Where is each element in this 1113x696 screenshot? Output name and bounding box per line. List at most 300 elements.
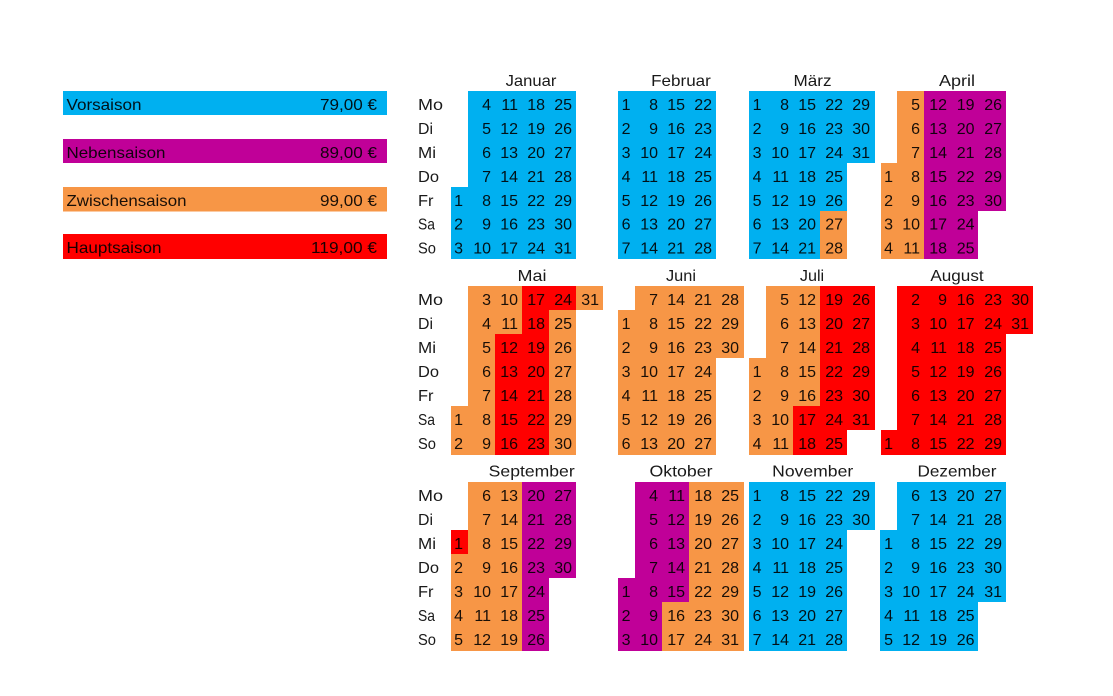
- days: Mai: 23: [527, 436, 545, 453]
- days: Oktober: 29: [721, 584, 739, 601]
- days: Mai: 11: [501, 316, 518, 333]
- days: Juli: 5: [780, 292, 789, 309]
- days: August: 24: [984, 316, 1002, 333]
- days: Juni: 16: [667, 340, 685, 357]
- days: März: 2: [753, 121, 762, 138]
- days: April: 6: [911, 121, 920, 138]
- legend row: Hauptsaison: [63, 234, 387, 259]
- days: Februar: 2: [622, 121, 631, 138]
- days: Oktober: 10: [640, 632, 658, 649]
- days: Januar: 11: [501, 97, 518, 114]
- days: Oktober: 15: [667, 584, 685, 601]
- month: Mai: Mai: [518, 268, 546, 285]
- days: Februar: 13: [640, 216, 658, 234]
- weekday labels: row 3: Di: [418, 512, 433, 529]
- days: Juli: 11: [772, 436, 789, 453]
- days: Dezember: 10: [902, 584, 920, 601]
- legend row: Zwischensaison: Zwischensaison: [66, 193, 186, 210]
- weekday labels: row 2: Mi: [418, 340, 436, 357]
- days: August: 25: [984, 340, 1002, 357]
- month: April: [881, 73, 1006, 259]
- days: April: 5: [911, 97, 920, 114]
- days: Juli: 15: [798, 364, 816, 381]
- days: Juni: 10: [640, 364, 658, 381]
- days: November: 3: [753, 536, 762, 553]
- days: April: 4: [884, 240, 893, 258]
- days: Januar: 10: [473, 240, 491, 258]
- legend: season prices: [63, 91, 387, 259]
- days: Juni: 26: [694, 412, 712, 429]
- days: April: [884, 97, 1002, 258]
- days: Oktober: 20: [694, 536, 712, 553]
- days: Dezember: 14: [929, 512, 947, 529]
- days: November: 10: [771, 536, 789, 553]
- weekday labels: row 1: Do: [418, 169, 439, 186]
- days: März: 16: [798, 121, 816, 138]
- weekday labels: row 1: Mi: [418, 145, 436, 162]
- weekday labels: row 1: Mo: [418, 97, 443, 114]
- days: August: 15: [929, 436, 947, 453]
- days: April: 16: [929, 193, 947, 210]
- days: Mai: 30: [554, 436, 572, 453]
- days: Februar: 11: [641, 169, 658, 186]
- month: Juli: [749, 268, 875, 455]
- days: Oktober: 9: [649, 608, 658, 625]
- days: Mai: 16: [500, 436, 518, 453]
- month: Februar: Februar: [651, 73, 712, 90]
- days: Oktober: 17: [667, 632, 685, 649]
- days: März: 21: [798, 240, 816, 258]
- days: August: 22: [957, 436, 975, 453]
- month: November: [749, 464, 875, 651]
- days: April: 8: [911, 169, 920, 186]
- days: April: 15: [929, 169, 947, 186]
- days: April: 12: [929, 97, 947, 114]
- days: Oktober: 19: [694, 512, 712, 529]
- days: August: 30: [1011, 292, 1029, 309]
- days: April: 20: [957, 121, 975, 138]
- days: Dezember: [884, 488, 1002, 649]
- legend row: Vorsaison: [63, 91, 387, 115]
- days: Mai: 10: [500, 292, 518, 309]
- days: Februar: 14: [640, 240, 658, 258]
- days: November: 24: [825, 536, 843, 553]
- days: Februar: 18: [667, 169, 685, 186]
- weekday labels: row 3: Fr: [418, 584, 434, 601]
- days: Dezember: 12: [902, 632, 920, 649]
- days: Oktober: 7: [649, 560, 658, 577]
- days: Oktober: 14: [667, 560, 685, 577]
- days: Dezember: 22: [957, 536, 975, 553]
- days: Oktober: 5: [649, 512, 658, 529]
- weekday labels: row 2: Sa: [418, 412, 435, 429]
- legend row: Zwischensaison: 99,00 €: [320, 193, 377, 210]
- month: August: August: [930, 268, 984, 285]
- days: Juni: 7: [649, 292, 658, 309]
- days: September: 10: [473, 584, 491, 601]
- days: Juli: 13: [798, 316, 816, 333]
- weekday labels: row 2: Di: [418, 316, 433, 333]
- month: Februar: [618, 73, 716, 259]
- days: Dezember: 4: [884, 608, 893, 625]
- days: Januar: 28: [554, 169, 572, 186]
- days: November: 4: [753, 560, 762, 577]
- month: November: November: [772, 464, 854, 480]
- days: Oktober: 23: [694, 608, 712, 625]
- weekday labels: row 2: Do: [418, 364, 439, 381]
- days: Mai: 28: [554, 388, 572, 405]
- days: September: 4: [454, 608, 463, 625]
- days: Mai: 19: [527, 340, 545, 357]
- days: März: 5: [753, 193, 762, 210]
- days: August: 4: [911, 340, 920, 357]
- weekday labels: row 3: Sa: [418, 608, 435, 625]
- days: März: 13: [771, 216, 789, 234]
- month: Juli: Juli: [800, 268, 824, 285]
- days: Januar: 22: [527, 193, 545, 210]
- days: Juli: 4: [753, 436, 762, 453]
- days: April: 23: [957, 193, 975, 210]
- days: Mai: 29: [554, 412, 572, 429]
- weekday labels: row 1: Di: [418, 121, 433, 138]
- days: Dezember: 1: [884, 536, 893, 553]
- days: Juni: 11: [641, 388, 658, 405]
- days: Mai: 22: [527, 412, 545, 429]
- days: Januar: 19: [527, 121, 545, 138]
- days: Juli: 12: [798, 292, 816, 309]
- days: Mai: 4: [482, 316, 491, 333]
- days: Oktober: 25: [721, 488, 739, 505]
- days: April: 18: [929, 240, 947, 258]
- days: Februar: 22: [694, 97, 712, 114]
- days: Juni: 29: [721, 316, 739, 333]
- days: Oktober: 3: [622, 632, 631, 649]
- weekday labels: row 2: Mo: [418, 292, 443, 309]
- days: Januar: 26: [554, 121, 572, 138]
- days: November: 15: [798, 488, 816, 505]
- days: Juli: 30: [852, 388, 870, 405]
- days: Dezember: 17: [929, 584, 947, 601]
- days: Dezember: 3: [884, 584, 893, 601]
- days: Juli: 6: [780, 316, 789, 333]
- days: Juni: 17: [667, 364, 685, 381]
- days: Juli: 20: [825, 316, 843, 333]
- days: Juli: 9: [780, 388, 789, 405]
- days: März: 14: [771, 240, 789, 258]
- month: Oktober: [618, 464, 744, 651]
- month: August: [881, 268, 1033, 455]
- days: September: 25: [527, 608, 545, 625]
- days: April: 3: [884, 216, 893, 234]
- days: Oktober: 30: [721, 608, 739, 625]
- days: März: 25: [825, 169, 843, 186]
- days: Dezember: 26: [957, 632, 975, 649]
- days: September: 5: [454, 632, 463, 649]
- days: Juli: 2: [753, 388, 762, 405]
- weekday labels: row 3: Mo: [418, 488, 443, 505]
- month: Dezember: Dezember: [918, 464, 997, 480]
- days: November: 19: [798, 584, 816, 601]
- days: Dezember: 31: [984, 584, 1002, 601]
- days: August: 29: [984, 436, 1002, 453]
- days: März: 12: [771, 193, 789, 210]
- days: Dezember: 9: [911, 560, 920, 577]
- days: April: 27: [984, 121, 1002, 138]
- days: August: 28: [984, 412, 1002, 429]
- days: Februar: 20: [667, 216, 685, 234]
- month: Oktober: Oktober: [650, 464, 713, 480]
- days: April: 19: [957, 97, 975, 114]
- days: Januar: 27: [554, 145, 572, 162]
- days: Juli: 14: [798, 340, 816, 357]
- days: August: 11: [930, 340, 947, 357]
- days: Januar: 23: [527, 216, 545, 234]
- days: August: 13: [929, 388, 947, 405]
- days: Januar: 24: [527, 240, 545, 258]
- days: Juni: 27: [694, 436, 712, 453]
- days: Februar: 4: [622, 169, 631, 186]
- days: April: 26: [984, 97, 1002, 114]
- days: August: 26: [984, 364, 1002, 381]
- days: Januar: 9: [482, 216, 491, 234]
- month: Januar: [451, 73, 576, 259]
- legend row: Hauptsaison: Hauptsaison: [66, 240, 162, 257]
- days: Februar: 17: [667, 145, 685, 162]
- weekday labels: row 1: Sa: [418, 216, 435, 234]
- days: Mai: [454, 292, 599, 453]
- days: Dezember: 23: [957, 560, 975, 577]
- days: März: 19: [798, 193, 816, 210]
- days: November: 8: [780, 488, 789, 505]
- days: August: 10: [929, 316, 947, 333]
- days: August: 18: [957, 340, 975, 357]
- days: September: 26: [527, 632, 545, 649]
- days: März: 4: [753, 169, 762, 186]
- days: November: 6: [753, 608, 762, 625]
- days: Oktober: 11: [668, 488, 685, 505]
- days: August: 19: [957, 364, 975, 381]
- days: Juli: 31: [852, 412, 870, 429]
- days: Juni: 5: [622, 412, 631, 429]
- days: März: 7: [753, 240, 762, 258]
- days: August: 5: [911, 364, 920, 381]
- days: November: 25: [825, 560, 843, 577]
- days: März: 26: [825, 193, 843, 210]
- days: September: 8: [482, 536, 491, 553]
- days: Februar: 25: [694, 169, 712, 186]
- days: Oktober: 28: [721, 560, 739, 577]
- days: Juni: 15: [667, 316, 685, 333]
- days: Juni: 25: [694, 388, 712, 405]
- days: Juli: 26: [852, 292, 870, 309]
- days: Juli: 18: [798, 436, 816, 453]
- legend row: Vorsaison: Vorsaison: [66, 97, 142, 114]
- days: Juni: 20: [667, 436, 685, 453]
- days: Februar: 12: [640, 193, 658, 210]
- days: April: 2: [884, 193, 893, 210]
- days: Februar: 24: [694, 145, 712, 162]
- days: August: 31: [1011, 316, 1029, 333]
- days: April: 14: [929, 145, 947, 162]
- days: November: [753, 488, 870, 649]
- days: Mai: 25: [554, 316, 572, 333]
- days: November: 14: [771, 632, 789, 649]
- days: Juli: 8: [780, 364, 789, 381]
- days: September: 30: [554, 560, 572, 577]
- legend row: Nebensaison: 89,00 €: [320, 145, 377, 162]
- days: August: 16: [957, 292, 975, 309]
- days: Mai: 13: [500, 364, 518, 381]
- days: Juni: 9: [649, 340, 658, 357]
- month: März: [749, 73, 875, 259]
- days: November: 2: [753, 512, 762, 529]
- days: September: 20: [527, 488, 545, 505]
- days: April: 29: [984, 169, 1002, 186]
- days: Juli: 23: [825, 388, 843, 405]
- days: August: 7: [911, 412, 920, 429]
- days: November: 12: [771, 584, 789, 601]
- days: Dezember: 30: [984, 560, 1002, 577]
- days: August: [884, 292, 1029, 453]
- days: März: 22: [825, 97, 843, 114]
- month: Dezember: [880, 464, 1006, 651]
- days: Juni: 2: [622, 340, 631, 357]
- month: Juni: [618, 268, 744, 455]
- days: Mai: 14: [500, 388, 518, 405]
- days: Juni: 1: [622, 316, 631, 333]
- days: November: 17: [798, 536, 816, 553]
- days: März: 28: [825, 240, 843, 258]
- days: Juli: 10: [771, 412, 789, 429]
- days: Dezember: 11: [903, 608, 920, 625]
- weekday labels: row 3: [418, 488, 443, 649]
- days: November: 5: [753, 584, 762, 601]
- days: Juli: [753, 292, 870, 453]
- month: Juni: Juni: [666, 268, 696, 285]
- days: Juli: 19: [825, 292, 843, 309]
- days: September: 27: [554, 488, 572, 505]
- days: Mai: 5: [482, 340, 491, 357]
- days: Mai: 21: [527, 388, 545, 405]
- days: August: 14: [929, 412, 947, 429]
- days: April: 28: [984, 145, 1002, 162]
- days: September: 2: [454, 560, 463, 577]
- days: November: 20: [798, 608, 816, 625]
- days: August: 23: [984, 292, 1002, 309]
- days: April: 25: [957, 240, 975, 258]
- days: Januar: 21: [527, 169, 545, 186]
- days: April: 24: [957, 216, 975, 234]
- days: Oktober: 22: [694, 584, 712, 601]
- days: November: 11: [772, 560, 789, 577]
- days: Juni: 14: [667, 292, 685, 309]
- days: Mai: 24: [554, 292, 572, 309]
- days: Januar: 12: [500, 121, 518, 138]
- days: Dezember: 20: [957, 488, 975, 505]
- days: Mai: 17: [527, 292, 545, 309]
- days: Januar: 15: [500, 193, 518, 210]
- days: Mai: 1: [454, 412, 463, 429]
- days: Januar: 16: [500, 216, 518, 234]
- days: April: 7: [911, 145, 920, 162]
- days: Mai: 7: [482, 388, 491, 405]
- legend row: Nebensaison: Nebensaison: [66, 145, 166, 162]
- days: Februar: 9: [649, 121, 658, 138]
- days: Dezember: 25: [957, 608, 975, 625]
- days: Oktober: 24: [694, 632, 712, 649]
- days: Juli: 25: [825, 436, 843, 453]
- days: Januar: 20: [527, 145, 545, 162]
- days: Juni: 6: [622, 436, 631, 453]
- days: Januar: 13: [500, 145, 518, 162]
- days: September: [454, 488, 572, 649]
- days: Juni: 30: [721, 340, 739, 357]
- days: Juli: 16: [798, 388, 816, 405]
- days: Januar: 6: [482, 145, 491, 162]
- days: Juni: 18: [667, 388, 685, 405]
- days: Juli: 27: [852, 316, 870, 333]
- weekday labels: row 1: Fr: [418, 193, 434, 210]
- days: Februar: 23: [694, 121, 712, 138]
- days: Oktober: 26: [721, 512, 739, 529]
- days: November: 23: [825, 512, 843, 529]
- days: Mai: 18: [527, 316, 545, 333]
- days: Oktober: 18: [694, 488, 712, 505]
- weekday labels: row 3: So: [418, 632, 436, 649]
- days: Januar: [454, 97, 572, 258]
- days: Dezember: 7: [911, 512, 920, 529]
- days: September: 23: [527, 560, 545, 577]
- days: Dezember: 18: [929, 608, 947, 625]
- days: April: 17: [929, 216, 947, 234]
- days: Juni: 28: [721, 292, 739, 309]
- days: November: 18: [798, 560, 816, 577]
- days: August: 21: [957, 412, 975, 429]
- days: November: 22: [825, 488, 843, 505]
- days: Mai: 12: [500, 340, 518, 357]
- days: Februar: 7: [622, 240, 631, 258]
- days: September: 17: [500, 584, 518, 601]
- days: Juli: 24: [825, 412, 843, 429]
- days: Februar: 8: [649, 97, 658, 114]
- legend row: Hauptsaison: 119,00 €: [311, 240, 377, 257]
- days: August: 27: [984, 388, 1002, 405]
- days: März: 29: [852, 97, 870, 114]
- month: September: [451, 464, 576, 651]
- days: Januar: 4: [482, 97, 491, 114]
- days: Juli: 21: [825, 340, 843, 357]
- days: Mai: 15: [500, 412, 518, 429]
- days: November: 13: [771, 608, 789, 625]
- days: Februar: 16: [667, 121, 685, 138]
- days: Juni: 22: [694, 316, 712, 333]
- days: Oktober: [622, 488, 739, 649]
- days: Dezember: 16: [929, 560, 947, 577]
- days: Juni: 13: [640, 436, 658, 453]
- days: September: 28: [554, 512, 572, 529]
- days: März: 24: [825, 145, 843, 162]
- days: Februar: 6: [622, 216, 631, 234]
- days: Dezember: 21: [957, 512, 975, 529]
- days: April: 1: [884, 169, 893, 186]
- days: April: 30: [984, 193, 1002, 210]
- days: April: 21: [957, 145, 975, 162]
- days: November: 9: [780, 512, 789, 529]
- days: Februar: 21: [667, 240, 685, 258]
- weekday labels: row 2: [418, 292, 443, 453]
- legend row: Zwischensaison: [63, 187, 387, 212]
- days: März: 11: [772, 169, 789, 186]
